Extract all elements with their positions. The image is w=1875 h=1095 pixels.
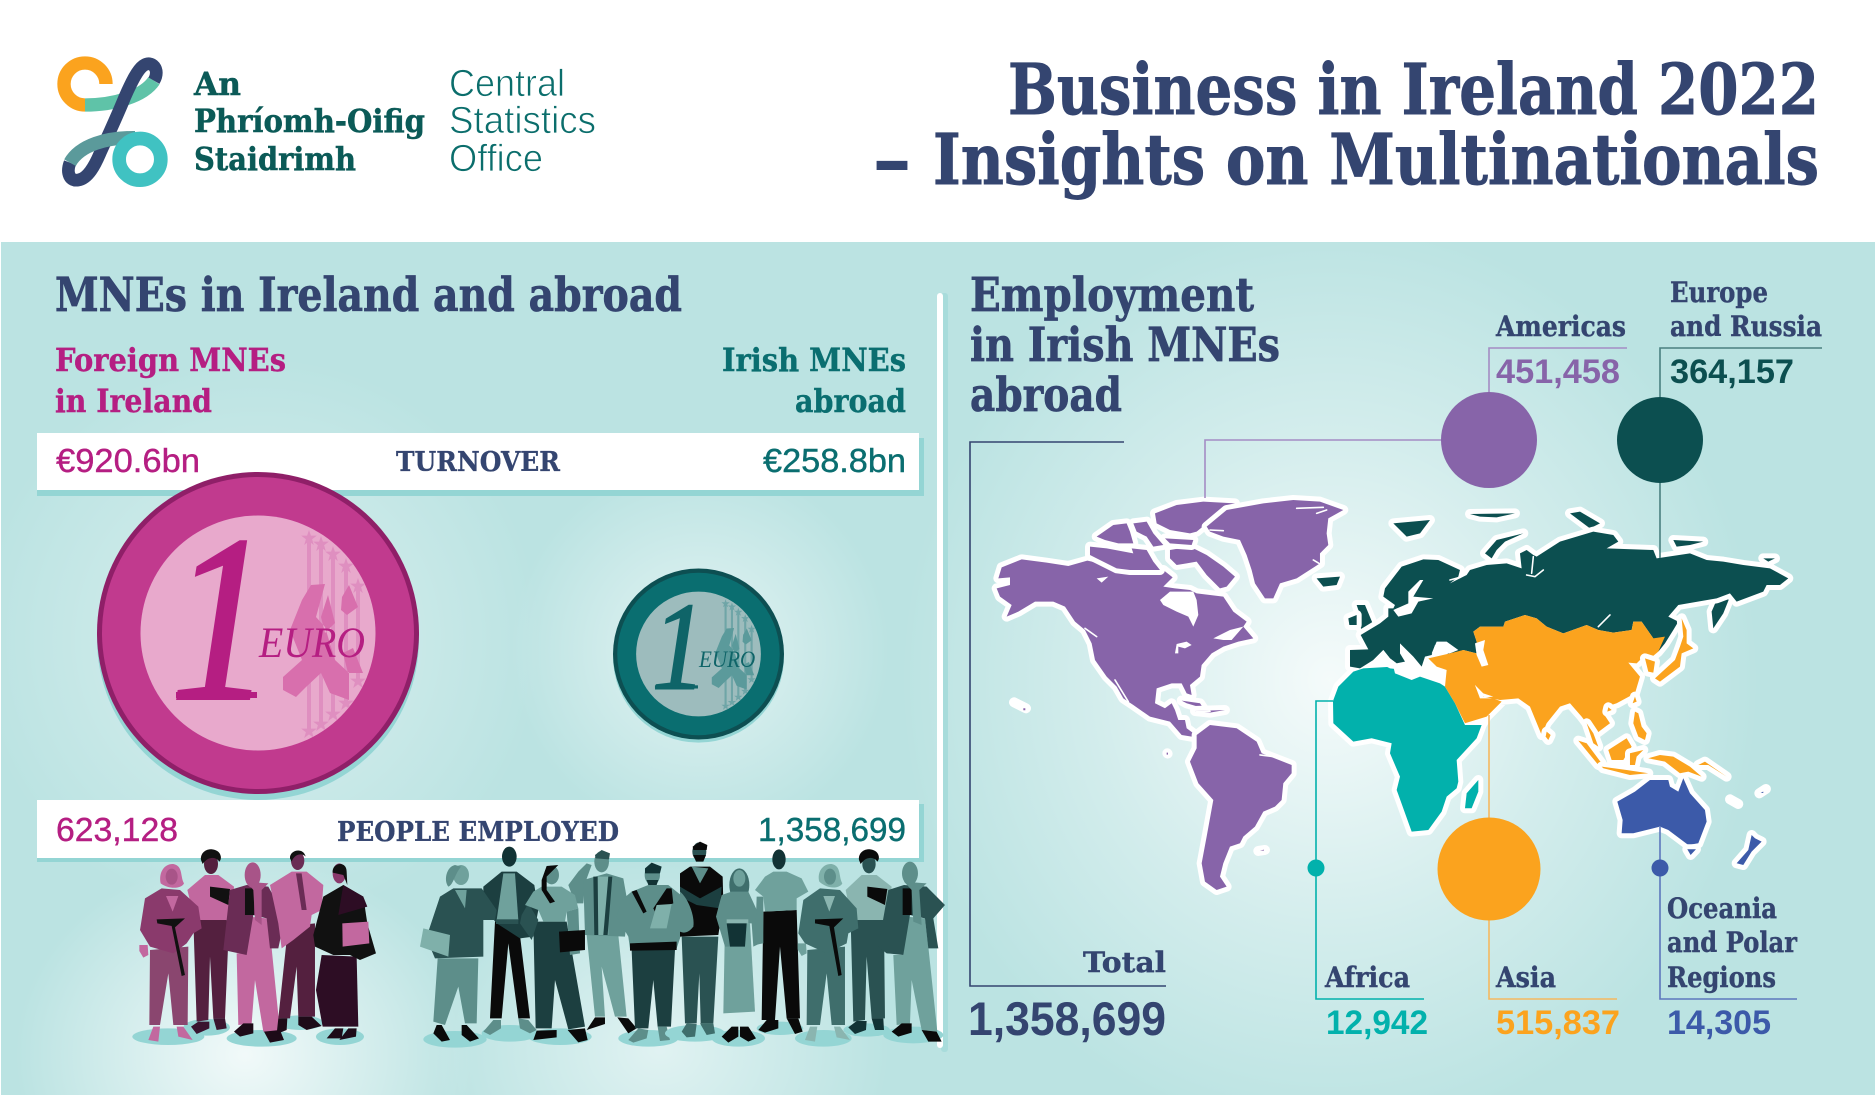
- heading: Foreign MNEs in Ireland: Foreign MNEs: [55, 341, 286, 379]
- illustration: Irish MNE workers, left group: [420, 847, 685, 1048]
- callout: Asia: Asia: [1495, 961, 1556, 994]
- icon: large euro coin: EURO: [258, 620, 365, 667]
- panel: background: [1, 242, 1875, 1095]
- callout: Europe and Russia: 364,157: [1670, 353, 1794, 391]
- callout: Total: 1,358,699: [968, 992, 1166, 1045]
- heading: Employment in Irish MNEs abroad: Employment: [970, 268, 1254, 323]
- divider: [937, 293, 948, 1052]
- region: Americas: [997, 500, 1343, 890]
- callout: Africa: Africa: [1324, 961, 1410, 994]
- person: woman with braid: [520, 865, 588, 1042]
- logo text: Irish name: Phríomh-Oifig: [194, 102, 425, 140]
- heading: Irish MNEs abroad: abroad: [795, 382, 906, 420]
- region: Europe and Russia mainland: [1350, 532, 1788, 668]
- callout: Total: [968, 946, 1166, 1045]
- person: man with crossed arms: [680, 842, 723, 1037]
- logo text: Irish name: Staidrimh: [194, 140, 356, 178]
- value: foreign turnover: €920.6bn: [56, 442, 200, 479]
- icon: small euro coin: [613, 569, 784, 743]
- callout: Oceania and Polar Regions: Regions: [1667, 961, 1776, 994]
- region: Oceania: [1617, 778, 1766, 865]
- person: woman in hijab: [223, 862, 285, 1043]
- heading: Irish MNEs abroad: [722, 341, 906, 420]
- person: man with clipboard: [617, 863, 685, 1043]
- heading: Employment in Irish MNEs abroad: abroad: [970, 368, 1122, 423]
- callout: Total: Total: [1083, 946, 1166, 979]
- logo text: English name: Office: [449, 138, 543, 180]
- person: man in dark jacket: [483, 847, 538, 1035]
- leader: total bracket: [970, 442, 1166, 986]
- person: man in pink jacket: [270, 850, 323, 1034]
- callout: Americas: [1205, 310, 1627, 498]
- heading: Foreign MNEs in Ireland: [55, 341, 286, 420]
- heading: Irish MNEs abroad: Irish MNEs: [722, 341, 906, 379]
- label: people employed: PEOPLE EMPLOYED: [337, 817, 619, 848]
- callout: Americas: Americas: [1495, 310, 1626, 343]
- person: clipboard man's arm overlap: [680, 892, 694, 933]
- value: Irish turnover: €258.8bn: [763, 442, 906, 479]
- person: man in pink shirt: [187, 849, 234, 1034]
- value: Irish employment: 1,358,699: [758, 811, 906, 848]
- panel: turnover bar: [37, 433, 924, 496]
- person: woman in belted suit: [798, 864, 858, 1042]
- callout: Africa: 12,942: [1326, 1004, 1428, 1042]
- callout: Europe and Russia: Europe: [1670, 276, 1768, 309]
- illustration: foreign MNE workers: [132, 849, 376, 1047]
- callout: Africa: [1308, 701, 1428, 1042]
- region: Asia: [1428, 615, 1727, 777]
- callout: Oceania and Polar Regions: Oceania: [1667, 892, 1777, 925]
- region: Africa: [1333, 667, 1482, 832]
- callout: Europe and Russia: [1617, 276, 1822, 558]
- title: [873, 48, 1819, 201]
- icon: large euro coin: [97, 472, 419, 800]
- callout: Americas: 451,458: [1496, 353, 1620, 391]
- callout: Oceania and Polar Regions: 14,305: [1667, 1004, 1771, 1042]
- person: woman in long skirt: [716, 868, 760, 1043]
- person: woman in hijab: [878, 862, 945, 1042]
- callout: Europe and Russia: and Russia: [1670, 310, 1822, 343]
- world map: [997, 500, 1788, 890]
- heading: MNEs in Ireland and abroad: MNEs in Ireland and abroad: [55, 268, 682, 323]
- person: woman in belted suit: [139, 864, 202, 1042]
- heading: Employment in Irish MNEs abroad: in Irish MNEs: [970, 318, 1280, 373]
- icon: large euro coin: 1: [171, 489, 271, 750]
- logo text: English name: Statistics: [449, 100, 596, 142]
- panel: people employed bar: [37, 800, 924, 862]
- person: man with glasses: [568, 850, 637, 1033]
- person: man in t-shirt: [755, 849, 808, 1034]
- callout: Oceania and Polar Regions: [1652, 827, 1798, 1042]
- logo: Central Statistics Office: [64, 63, 596, 180]
- person: man in light shirt: [846, 849, 892, 1034]
- person: woman with bag: [420, 865, 497, 1042]
- callout: Asia: 515,837: [1496, 1004, 1620, 1042]
- title: –: [873, 118, 911, 201]
- heading: Foreign MNEs in Ireland: in Ireland: [55, 382, 212, 420]
- callout: Asia: [1438, 715, 1620, 1042]
- person: woman in dark coat with folder: [313, 863, 376, 1040]
- callout: Oceania and Polar Regions: and Polar: [1667, 926, 1798, 959]
- logo text: English name: [449, 63, 596, 180]
- logo text: Irish name: [193, 65, 425, 178]
- heading: Employment in Irish MNEs abroad: [970, 268, 1280, 423]
- icon: small euro coin: 1: [652, 578, 705, 717]
- region: Europe and Russia, islands: [1348, 512, 1775, 630]
- illustration: Irish MNE workers, right group: [665, 842, 945, 1047]
- value: foreign employment: 623,128: [56, 811, 178, 848]
- label: turnover: TURNOVER: [396, 447, 561, 478]
- icon: small euro coin: EURO: [698, 647, 755, 672]
- logo text: English name: Central: [449, 63, 565, 105]
- logo symbol: [64, 63, 161, 180]
- logo text: Irish name: An: [193, 65, 241, 103]
